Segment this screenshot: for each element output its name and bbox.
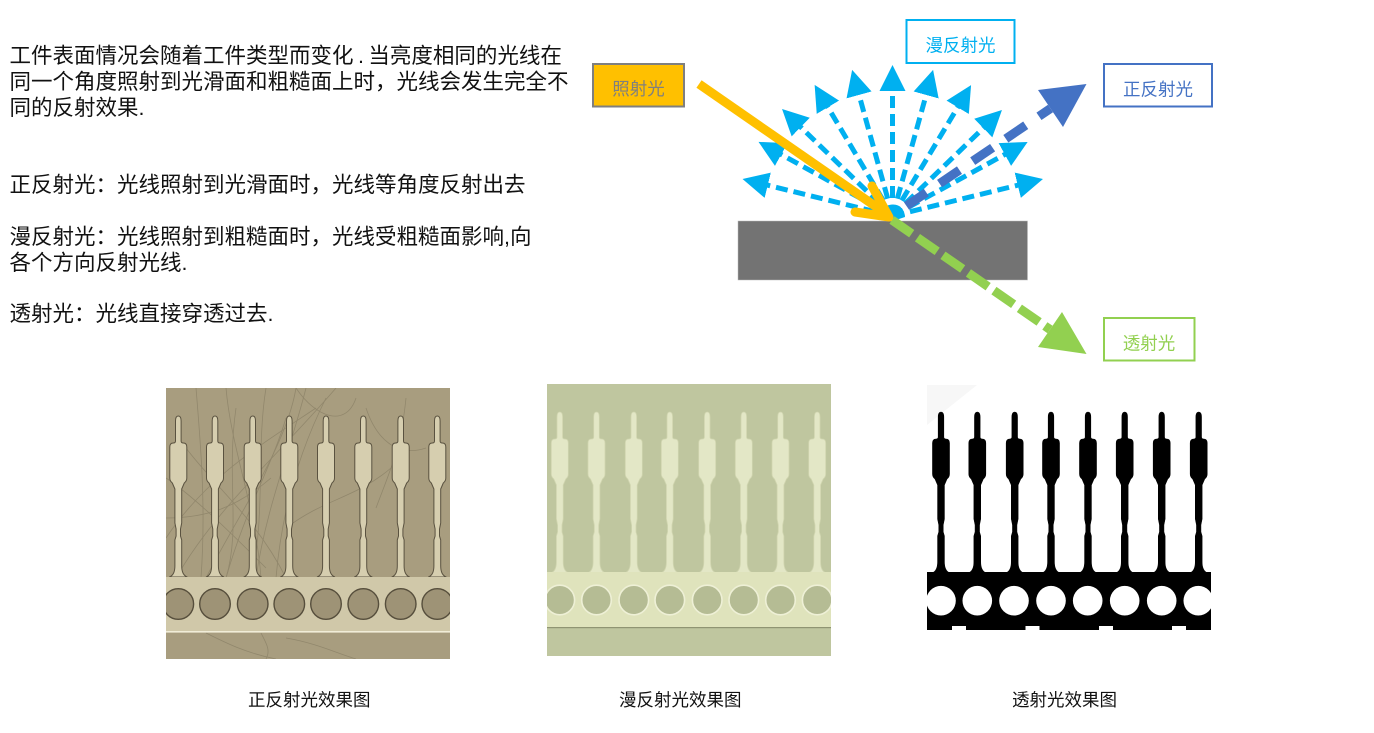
photo: diffuse reflection effect — [547, 384, 831, 656]
definition: diffuse reflection: 漫反射光：光线照射到粗糙面时，光线受粗糙面影响,向 — [10, 225, 531, 249]
light reflection diagram — [592, 19, 1213, 362]
caption: diffuse: 漫反射光效果图 — [619, 690, 742, 710]
definition: specular reflection: 正反射光：光线照射到光滑面时，光线等角度反射出去 — [10, 173, 526, 197]
pins — [932, 412, 1208, 573]
label: transmitted light — [1104, 318, 1194, 360]
label: incident light: 照射光 — [612, 79, 665, 99]
label: incident light — [593, 64, 684, 106]
photo: transmitted light effect — [927, 412, 1211, 630]
diffuse reflection arrows — [767, 90, 1019, 216]
transmitted light arrow — [892, 220, 1086, 354]
pins — [169, 416, 446, 577]
intro text: 同的反射效果. — [10, 96, 144, 120]
definition: diffuse reflection: 各个方向反射光线. — [10, 251, 187, 275]
definition: transmitted light: 透射光：光线直接穿透过去. — [10, 302, 273, 326]
intro text: 工件表面情况会随着工件类型而变化 . 当亮度相同的光线在 — [10, 44, 562, 68]
pins — [550, 412, 826, 573]
caption: transmitted: 透射光效果图 — [1012, 690, 1117, 710]
label: transmitted light: 透射光 — [1123, 334, 1175, 354]
label: diffuse reflection — [906, 20, 1014, 63]
caption: specular: 正反射光效果图 — [248, 690, 370, 710]
pilot holes — [163, 589, 453, 619]
label: specular reflection: 正反射光 — [1123, 80, 1193, 100]
intro text: 同一个角度照射到光滑面和粗糙面上时，光线会发生完全不 — [10, 70, 569, 94]
carrier strip — [546, 572, 830, 628]
label: specular reflection — [1104, 64, 1212, 106]
definition: diffuse reflection — [10, 225, 531, 275]
carrier strip — [166, 577, 450, 632]
scratches — [166, 388, 426, 659]
pilot holes — [926, 586, 1213, 616]
incident light arrow — [699, 84, 889, 217]
photo: specular reflection effect — [166, 388, 450, 659]
specular reflection arrow — [899, 84, 1086, 211]
pilot holes — [544, 585, 832, 615]
bottom notches — [952, 626, 1186, 630]
label: diffuse reflection: 漫反射光 — [926, 36, 996, 56]
carrier strip — [927, 572, 1211, 630]
intro text — [10, 44, 569, 120]
incidence point — [878, 203, 908, 221]
surface block — [738, 221, 1028, 280]
